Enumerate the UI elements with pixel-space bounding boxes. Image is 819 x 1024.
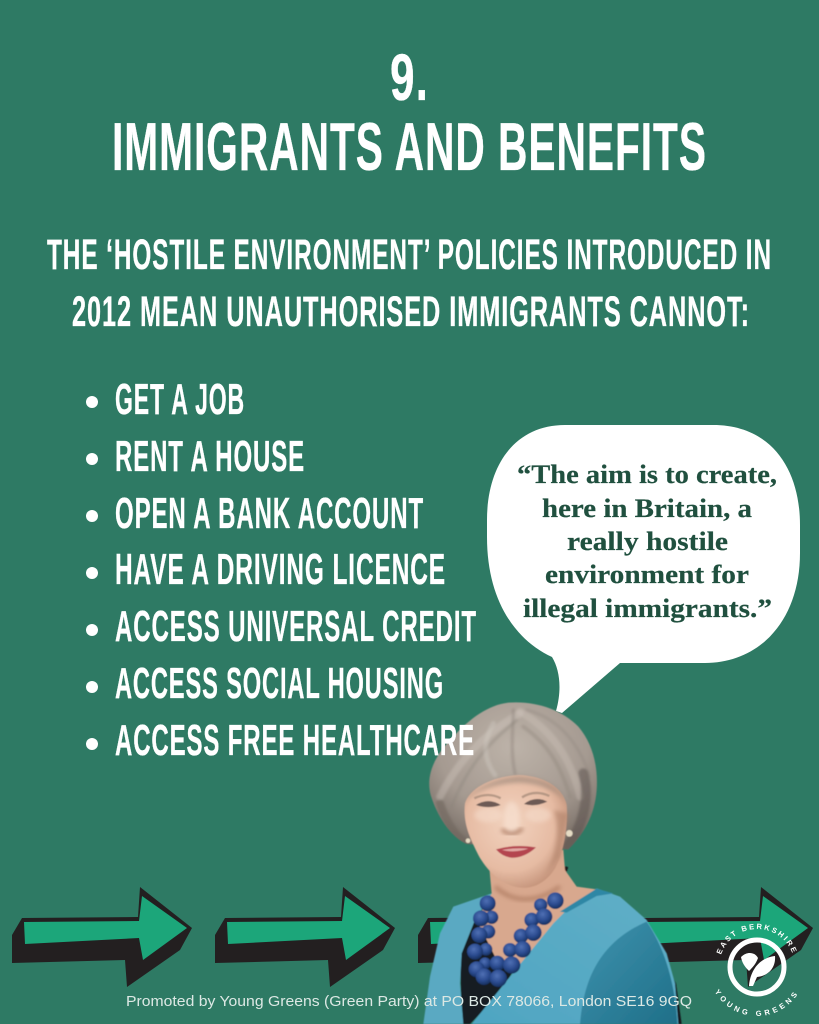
title: 9.: [390, 40, 429, 114]
jacket right panel: [472, 888, 678, 1024]
benefit list: ACCESS UNIVERSAL CREDIT: [115, 602, 477, 651]
benefit list: GET A JOB: [115, 375, 245, 424]
arrow 3: [418, 887, 598, 987]
quote text: [517, 460, 777, 623]
quote text: illegal immigrants.”: [523, 594, 772, 623]
arrow 1: [12, 887, 192, 987]
jacket collar: [560, 889, 613, 913]
portrait photo: [423, 702, 682, 1024]
necklace beads: [467, 892, 564, 987]
icon: leaves: [741, 953, 775, 986]
earrings: [566, 830, 573, 837]
footer imprint: Promoted by Young Greens (Green Party) at PO BOX 78066, London SE16 9GQ: [126, 994, 692, 1010]
benefit list: RENT A HOUSE: [115, 432, 305, 481]
benefit list: [86, 375, 477, 765]
neck cord: [557, 867, 567, 893]
dark blouse: [460, 917, 520, 1024]
jacket sleeve: [580, 922, 677, 1024]
mouth: [496, 846, 536, 858]
arrow 2: [215, 887, 395, 987]
eyes: [476, 801, 501, 807]
jacket left panel: [423, 893, 492, 1024]
quote text: environment for: [545, 560, 749, 589]
benefit list: OPEN A BANK ACCOUNT: [115, 489, 424, 538]
nose: [504, 802, 520, 835]
bullets: [86, 396, 98, 750]
title: [112, 40, 707, 185]
neck and chest: [477, 850, 600, 973]
arrow 4: [633, 887, 813, 987]
benefit list: ACCESS SOCIAL HOUSING: [115, 659, 444, 708]
logo: East Berkshire Young Greens: [716, 924, 797, 1016]
hair: [429, 702, 597, 849]
quote text: here in Britain, a: [542, 494, 752, 523]
logo: East Berkshire Young Greens: EAST BERKSHIRE: [716, 924, 797, 954]
quote text: “The aim is to create,: [517, 460, 777, 489]
intro text: [47, 231, 772, 336]
face: [465, 775, 568, 888]
quote text: really hostile: [567, 527, 728, 556]
benefit list: HAVE A DRIVING LICENCE: [115, 545, 446, 594]
benefit list: ACCESS FREE HEALTHCARE: [115, 716, 475, 765]
logo: East Berkshire Young Greens: YOUNG GREENS: [716, 988, 797, 1016]
speech bubble: [487, 425, 800, 713]
